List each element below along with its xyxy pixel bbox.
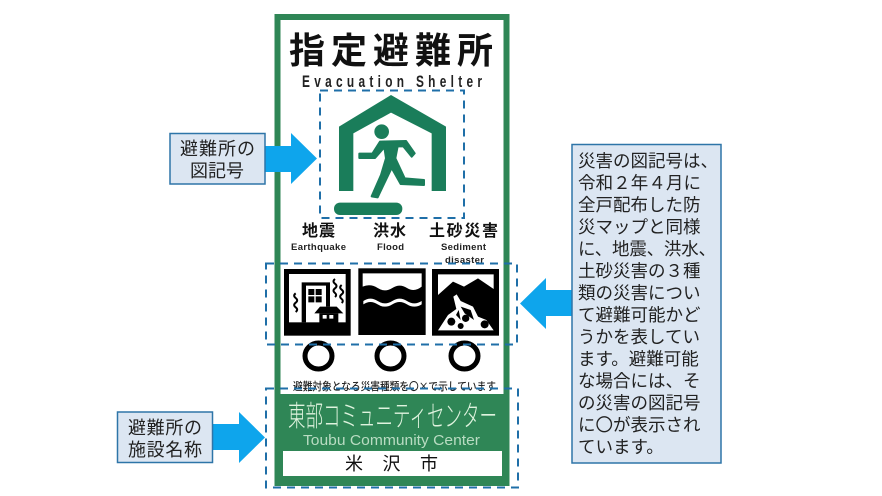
callout: facility name: 避難所の: [128, 414, 202, 440]
icon: sediment disaster: [432, 269, 499, 336]
subtitle: Evacuation Shelter: [302, 73, 482, 92]
callout: hazard explanation: 令和２年４月に: [578, 170, 701, 195]
panel: shelter sign: [275, 17, 509, 483]
callout: hazard explanation: の災害の図記号: [578, 390, 700, 415]
hazard labels: Flood: [377, 242, 404, 253]
arrow: to facility name: [213, 412, 265, 463]
running figure: [359, 125, 424, 197]
icon: flood: [358, 268, 426, 335]
callout: shelter symbol: 図記号: [190, 157, 244, 183]
hazard labels: 地震: [302, 217, 335, 241]
city name plate: [283, 451, 502, 476]
facility name block: [275, 393, 509, 483]
callout: hazard explanation: ています。: [578, 434, 664, 459]
hazard labels: 土砂災害: [429, 217, 498, 241]
callout: hazard explanation: 災マップと同様: [578, 214, 701, 239]
callout: hazard explanation: に〇が表示され: [578, 412, 701, 437]
callout: hazard explanation: [572, 144, 721, 463]
callout: shelter symbol: 避難所の: [180, 135, 255, 161]
hazard labels: disaster: [445, 255, 484, 266]
callout: hazard explanation: に、地震、洪水、: [578, 236, 716, 261]
hazard labels: Earthquake: [291, 242, 346, 253]
dashed highlight: hazard icons: [266, 264, 517, 344]
hazard labels: Sediment: [441, 242, 487, 253]
house outline: [339, 95, 446, 191]
arrow: to hazard icons: [520, 278, 572, 329]
sign frame: [278, 17, 506, 483]
city name: 米沢市: [345, 450, 438, 476]
callout: hazard explanation: ます。避難可能: [578, 346, 699, 371]
dashed highlight: facility name: [266, 388, 518, 488]
hazard labels: 洪水: [373, 217, 406, 241]
callout: hazard explanation: 類の災害につい: [578, 280, 700, 305]
callout: shelter symbol: [170, 134, 265, 184]
facility name japanese: 東部コミュニティセンター: [288, 393, 497, 435]
callout: hazard explanation: 土砂災害の３種: [578, 258, 700, 283]
callout: hazard explanation: 災害の図記号は、: [578, 148, 718, 173]
callout: hazard explanation: うかを表してい: [578, 324, 700, 349]
callout: facility name: [118, 412, 212, 462]
title: 指定避難所: [289, 22, 493, 74]
arrow: to shelter symbol: [265, 133, 317, 184]
availability circles: [305, 343, 478, 369]
note text: 避難対象となる災害種類を〇×で示しています: [293, 378, 496, 394]
callout: hazard explanation: な場合には、そ: [578, 368, 700, 393]
platform: [334, 203, 402, 215]
icon: evacuation shelter symbol: [334, 95, 446, 215]
dashed highlight: shelter symbol: [320, 90, 464, 218]
icon: earthquake: [284, 269, 351, 336]
callout: facility name: 施設名称: [128, 436, 202, 462]
callout: hazard explanation: て避難可能かど: [578, 302, 700, 327]
callout: hazard explanation: 全戸配布した防: [578, 192, 700, 217]
hazard labels: [291, 217, 498, 266]
facility name english: Toubu Community Center: [303, 432, 480, 449]
